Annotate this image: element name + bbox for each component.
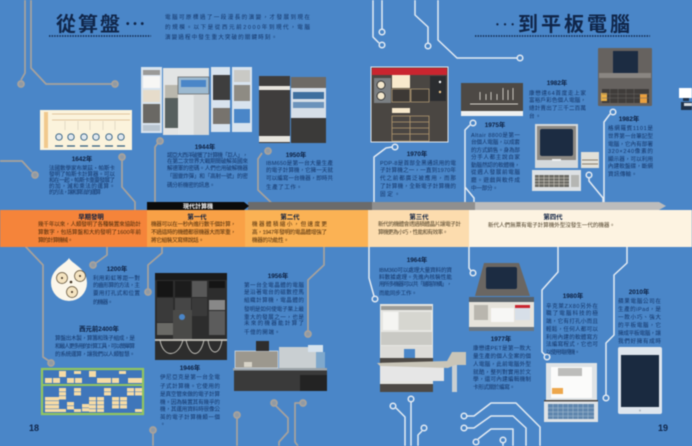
- text: 1982 laptop: 320×240像素的: [608, 147, 653, 155]
- text: 2010: 蘋果電腦公司在: [618, 297, 661, 305]
- intro text: 的規模。以下是從西元前2000年到現代，電腦: [165, 23, 310, 31]
- illustration: IBM System/360: [377, 304, 466, 392]
- text: 1970: 了計算機，全新電子計算機的: [380, 182, 456, 190]
- text: 1975: Altair 8800是第一: [471, 131, 520, 139]
- text: 2010: 一款小巧、強大: [618, 313, 661, 321]
- text: 1956: 是沿著電台的磁數控馬: [244, 288, 304, 296]
- text: 1982 laptop: 格網羅賓1101是: [608, 124, 653, 132]
- era: fourth generation: 新代人們無票有電子計算機外型沒發生一代的機器。: [488, 221, 615, 229]
- illustration: PDP-8: [371, 67, 448, 142]
- text: 1200: [93, 264, 140, 306]
- text: 1982 Commodore 64: 富裕戶彩色個人電腦，: [529, 96, 586, 104]
- text: 1956: 第一台全電晶體的電腦: [244, 281, 304, 289]
- illustration: Commodore PET: [469, 263, 534, 331]
- text: 1975: 廳。遊戲與軟件成: [471, 176, 520, 184]
- text: 1982 laptop: 顯示器，可以利用: [608, 155, 653, 163]
- text: 1975: [471, 120, 520, 192]
- era: fourth generation: [488, 212, 615, 229]
- text: 1946: 伊尼亞克是第一台全電: [160, 373, 220, 381]
- text: 1977: 康懋達PET是第一款大: [473, 344, 531, 352]
- era: third generation: 新代的機體會透過積體晶片讓電子計: [378, 220, 461, 228]
- text: 1982 laptop: 1982年: [619, 114, 640, 123]
- text: 1200: 的齒形算的方法，主: [93, 281, 140, 289]
- illustration: Sinclair ZX80: [544, 363, 598, 422]
- timeline band: [0, 210, 692, 247]
- text: 1944: [167, 142, 248, 189]
- text: 2400 BC: 和最人更多用的計算工具，可以簡單算: [55, 342, 135, 350]
- era: first generation: 不過這時的機體都很機器大而笨重，: [151, 228, 236, 236]
- text: 1964: 而能同步工作。: [379, 289, 417, 297]
- illustration: Commodore 64 personal computer: [532, 124, 599, 191]
- illustration: Altair 8800: [461, 83, 523, 116]
- era: first generation: [151, 212, 236, 244]
- text: 1950: [266, 150, 333, 191]
- text: 1964: 用所多機器可以共「鏈路架構」，: [379, 280, 452, 288]
- text: 1980: 端，它有打孔小而且: [546, 317, 598, 325]
- text: 1964: 料數據處理。先進內核裝性能: [379, 273, 452, 281]
- text: 1200: 1200年: [107, 264, 128, 273]
- text: 1944: 在第二次世界大戰期間破解英國來: [167, 157, 248, 165]
- title: to the tablet: [475, 13, 650, 36]
- illustration: transistor computer 1956: [233, 341, 327, 391]
- text: 1944: 碼分析機密的訊息。: [167, 181, 215, 189]
- era: fourth generation: 第四代: [543, 212, 563, 221]
- label: modern computers: 現代計算機: [183, 202, 213, 210]
- text: 1970: 固定。: [380, 190, 400, 198]
- timeline arrow bar: [147, 202, 666, 210]
- era: second generation: [252, 212, 327, 244]
- text: 2400 BC: 西元前2400年: [79, 324, 119, 333]
- text: 1642: 的方法，讓和算法的運算: [49, 188, 101, 196]
- era: second generation: 第二代: [280, 212, 300, 221]
- text: 1982 laptop: 資訊傳輸。: [608, 170, 637, 178]
- text: 1950: 的電子計算機，它擁一天就: [266, 166, 333, 174]
- text: 1980: 輕鬆，任何人都可以: [546, 325, 598, 333]
- text: 1982 Commodore 64: 總計賣出了三千二百萬: [529, 104, 586, 112]
- text: 1980: 1980年: [563, 291, 584, 300]
- text: 1956: 未來的機器能計算了: [244, 319, 304, 327]
- title: from the abacus: [49, 12, 151, 36]
- text: 1964: 1964年: [407, 255, 428, 264]
- text: 1975: 從週人發展前電腦: [471, 168, 520, 176]
- text: 1950: IBM650是第一台大量生產: [266, 159, 333, 167]
- era: early inventions: [38, 212, 141, 244]
- text: 2010: 的平板電腦，它: [618, 321, 661, 329]
- text: 1975: 動腦然認的軟體機，: [471, 161, 520, 169]
- text: 1946: 機，其運用資料時很像公: [160, 405, 220, 413]
- era: second generation: 機器體積縮小，但速度更: [252, 220, 327, 228]
- text: 1642: 的加，減和乘法的運算。: [49, 182, 115, 190]
- text: 1200: 利用彩虹等距一對: [93, 274, 140, 282]
- text: 1980: 利用內建的軟體寫方: [546, 333, 598, 341]
- text: 1956: 1956年: [268, 271, 289, 280]
- text: 1982 laptop: 世界第一台筆記型: [608, 132, 653, 140]
- text: 1977: 卡形式關於編寫。: [473, 383, 515, 391]
- text: 1970: 子計算機之一，一直到1970年: [380, 166, 456, 174]
- text: 1944: 諾亞大西洋破獲了計算機「巨人」，: [167, 151, 248, 159]
- page number 19: 19: [658, 423, 668, 433]
- text: 2010: 生產的iPad，是: [618, 305, 661, 313]
- text: 1977: [473, 334, 531, 391]
- text: 1982 laptop: 電腦，它內有部署: [608, 140, 653, 148]
- text: 1944: 「圖靈炸彈」和「高射一號」的密: [167, 172, 248, 180]
- text: 2010: 2010年: [629, 287, 650, 296]
- text: 1950: 可以編寫一台機器，即時共: [266, 174, 333, 182]
- text: 1980: 以使用電視機。: [546, 348, 580, 356]
- text: 1975: 1975年: [485, 120, 506, 129]
- text: 1977: 就酷，整列對實用於文: [473, 368, 531, 376]
- era: third generation: [378, 212, 461, 236]
- text: 1642: 法國數學家布萊茲・帕斯卡: [49, 164, 115, 172]
- title: from the abacus: •••: [126, 19, 144, 30]
- era: second generation: 機器的功能性。: [252, 236, 289, 244]
- intro text: 演變過程中發生重大突破的關鍵時刻。: [165, 33, 277, 41]
- text: 1956: 組織計算機，電晶體的: [244, 296, 304, 304]
- text: 1977: 人電腦，此前電腦外型: [473, 360, 531, 368]
- text: 1964: IBM360可以處理大量資料的資: [379, 266, 452, 274]
- era: early inventions: 算數字，包括算盤和大約發明了1600年前: [38, 228, 141, 236]
- era: early inventions: 早期發明: [78, 212, 104, 221]
- text: 1982 laptop: [608, 114, 653, 178]
- text: 1982 Commodore 64: 台。: [529, 112, 541, 120]
- text: 1946: 子式計算機。它使用的: [160, 382, 220, 390]
- illustration: iPad: [618, 347, 662, 414]
- era: first generation: 機器可以在一秒內進行數千個計算，: [151, 220, 236, 228]
- illustration: GRiD Compass laptop: [598, 48, 652, 106]
- text: 1642: 和在一起。帕斯卡重要發展了: [49, 176, 115, 184]
- text: 1956: 重大的發展之一，也是: [244, 313, 304, 321]
- text: 1980: [546, 291, 598, 356]
- text: 1970: 代之前都廣泛被應用，而那: [380, 174, 456, 182]
- text: 1970: PDP-8是首部全黑通訊用的電: [380, 159, 456, 167]
- text: 1946: 機。因為裝置其有幾乎的: [160, 398, 220, 406]
- text: 1944: 1944年: [195, 142, 216, 151]
- era: third generation: 算機更為小巧，性能和有效率。: [378, 228, 448, 236]
- page number 18: 18: [29, 423, 39, 433]
- text: 1975: 的方式銷售。身為部: [471, 146, 520, 154]
- text: 1970: 1970年: [407, 149, 428, 158]
- text: 1982 Commodore 64: 1982年: [547, 78, 568, 87]
- text: 1946: 英的電子計算機類一個: [160, 413, 220, 421]
- text: 1946: 是真空管來做的電子計算: [160, 390, 220, 398]
- era: early inventions: 算的計算機械。: [38, 236, 73, 244]
- text: 1956: [244, 271, 304, 336]
- text: 1642: 發明了帕斯卡計算器。可以: [49, 170, 115, 178]
- era: first generation: 第一代: [187, 212, 207, 221]
- text: 2400 BC: 算盤出木製，算籌和珠子組成，是: [55, 334, 135, 342]
- text: 1956: 發明是如何使電子業上最: [244, 305, 304, 313]
- text: 1975: 分手人都主說自家: [471, 153, 520, 161]
- illustration: Colossus 1944: [141, 67, 252, 135]
- text: 2400 BC: [55, 324, 135, 358]
- illustration: Pascaline calculator: [40, 110, 132, 150]
- text: 1642: [49, 154, 115, 196]
- text: 1982 Commodore 64: 康懋達64首度走上家: [529, 89, 586, 97]
- text: 1975: 台個人電腦，以成套: [471, 138, 520, 146]
- intro text: [165, 13, 310, 41]
- text: 1964: [379, 255, 452, 297]
- era: early inventions: 幾千年以來，人類發明了各種裝置來協助計: [38, 220, 141, 228]
- text: 2010: [618, 287, 661, 345]
- text: 1970: [380, 149, 456, 198]
- illustration: abacus: [42, 369, 143, 414]
- text: 1946: 。: [160, 422, 166, 428]
- title: to the tablet: •••: [496, 20, 514, 29]
- text: 1946: 1946年: [180, 363, 201, 372]
- text: 2400 BC: 的系統運算，讓我們以人類智慧。: [55, 350, 135, 358]
- text: 1977: 量生產的個人全案的個: [473, 352, 531, 360]
- text: 1980: 職了電腦科技的極: [546, 309, 598, 317]
- text: 1975: 中一部分。: [471, 184, 498, 192]
- intro text: 電腦可原標過了一段漫長的演變，才發展到現在: [165, 13, 310, 21]
- illustration: IBM 650: [259, 76, 326, 143]
- illustration: Napier style discs: [51, 258, 87, 301]
- title: to the tablet: 到平板電腦: [518, 13, 630, 36]
- text: 1200: 的機器。: [93, 298, 113, 306]
- illustration: ENIAC 1946: [155, 273, 227, 360]
- text: 1642: 1642年: [72, 154, 93, 163]
- text: 2010: 我們好擁有成時: [618, 337, 661, 345]
- text: 2010: 擁成平板電腦，讓: [618, 329, 661, 337]
- circuit traces: left page: [0, 0, 324, 446]
- text: 1982 laptop: 內建軟盤碟，斷網: [608, 162, 653, 170]
- text: 1956: 千億的開端。: [244, 328, 280, 336]
- text: 1950: 生產了工作。: [266, 183, 302, 191]
- era: third generation: 第三代: [409, 212, 429, 221]
- icon: cropped computer at right edge: [679, 88, 692, 110]
- text: 1200: 要用打孔式和位置: [93, 289, 140, 297]
- text: 1980: 法編寫程式，它也可: [546, 340, 598, 348]
- text: 1980: 辛克萊ZX80另外在: [546, 302, 598, 310]
- era: first generation: 將它組裝又寫條說話。: [151, 236, 204, 244]
- text: 1950: 1950年: [286, 150, 307, 159]
- title: from the abacus: 從算盤: [56, 12, 120, 36]
- text: 1977: 1977年: [491, 334, 512, 343]
- text: 1982 Commodore 64: [529, 78, 586, 120]
- text: 1977: 學，還可內建編輯機制: [473, 375, 531, 383]
- text: 1946: [160, 363, 220, 428]
- circuit traces: right page: [369, 0, 627, 446]
- era: second generation: 高，1947年發明的電晶體增強了: [252, 228, 327, 236]
- text: 1944: 解德軍的密碼。人們也用破解機器: [167, 164, 248, 172]
